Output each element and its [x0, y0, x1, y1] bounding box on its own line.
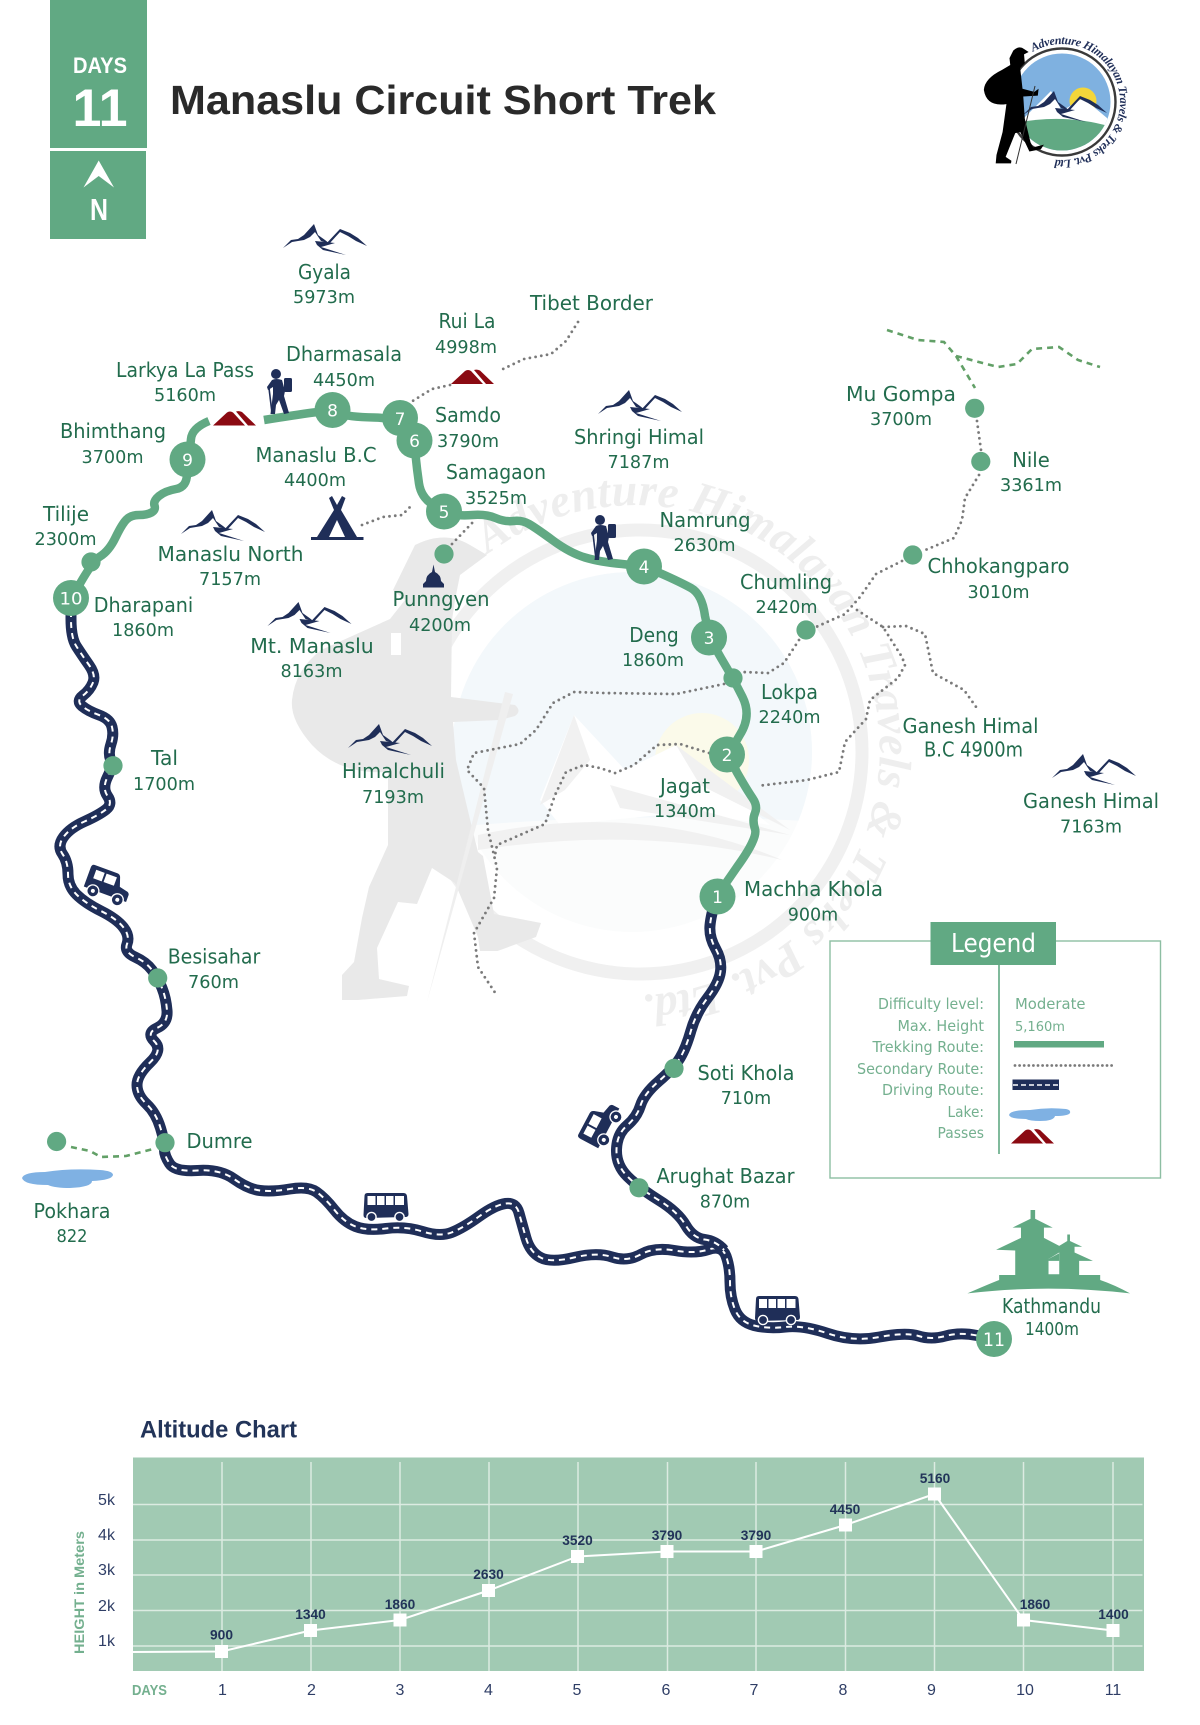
- label: Dharapani: [94, 593, 193, 641]
- driving route: west and south: [60, 600, 994, 1339]
- label: Tal: [133, 746, 195, 795]
- label: Soti Khola: 710m: [721, 1089, 771, 1109]
- legend: row labels: Secondary Route:: [857, 1060, 984, 1078]
- data values: [210, 1470, 1129, 1642]
- data values: 1340: [295, 1606, 326, 1622]
- label: Jagat: Jagat: [658, 774, 710, 798]
- legend: trekking sample: [1014, 1041, 1104, 1048]
- numbered stops: 11: [983, 1329, 1005, 1351]
- legend: row labels: Difficulty level:: [878, 995, 984, 1013]
- icon: mountain Mt. Manaslu: [268, 602, 352, 633]
- label: Ganesh Himal B.C: [902, 714, 1038, 762]
- label: Lokpa: [758, 680, 820, 728]
- label: Samdo: Samdo: [435, 403, 501, 427]
- label: Shringi Himal: [574, 425, 704, 473]
- label: Mt. Manaslu: 8163m: [280, 662, 342, 682]
- logo: Adventure Himalayan Travels and Treks: [984, 37, 1128, 168]
- data values: 1400: [1098, 1606, 1129, 1622]
- label: Ganesh Himal: Ganesh Himal: [1023, 789, 1159, 813]
- numbered stops: 5: [439, 503, 449, 523]
- label: Nile: [1000, 448, 1062, 496]
- labels: places and altitudes: [34, 260, 1159, 1340]
- label: Deng: [622, 623, 684, 671]
- legend heading: [930, 922, 1056, 965]
- label: Soti Khola: [698, 1061, 794, 1109]
- icon: bus west: [364, 1193, 408, 1222]
- x axis values: 9: [927, 1682, 936, 1699]
- label: Pokhara: Pokhara: [34, 1199, 110, 1223]
- label: Machha Khola: Machha Khola: [744, 877, 883, 901]
- legend: row labels: [857, 995, 984, 1142]
- label: Pokhara: 822: [56, 1227, 88, 1247]
- label: Tal: 1700m: [133, 775, 195, 795]
- label: Dharapani: Dharapani: [94, 593, 193, 617]
- icon: pass Larkya La: [213, 411, 256, 426]
- label: Namrung: Namrung: [660, 508, 750, 532]
- label: Larkya La Pass: [116, 358, 254, 406]
- label: Dharmasala: 4450m: [313, 371, 375, 391]
- days badge: [50, 0, 147, 148]
- icon: bus east: [755, 1296, 800, 1325]
- legend: lake sample: [1009, 1108, 1070, 1121]
- icon: stupa Punngyen: [423, 564, 444, 588]
- label: Nile: 3361m: [1000, 476, 1062, 496]
- x axis values: 2: [307, 1682, 316, 1699]
- label: Chhokangparo: [928, 554, 1070, 603]
- label: Namrung: [660, 508, 750, 556]
- label: Dumre: Dumre: [186, 1129, 252, 1153]
- label: Machha Khola: 900m: [788, 906, 838, 926]
- icon: mountain Manaslu North: [181, 510, 265, 541]
- label: Arughat Bazar: 870m: [700, 1192, 750, 1212]
- label: Samagaon: Samagaon: [446, 460, 546, 484]
- label: Ganesh Himal: 7163m: [1060, 818, 1122, 838]
- label: Samdo: 3790m: [437, 432, 499, 452]
- watermark: faded company logo behind map: Adventure Himalayan Travels & Treks Pvt. Ltd.: [484, 481, 912, 1026]
- label: Manaslu North: Manaslu North: [158, 542, 304, 566]
- altitude chart: [71, 1458, 1144, 1699]
- x axis values: 10: [1016, 1682, 1034, 1699]
- numbered stops: 3: [704, 629, 714, 649]
- watermark: faded company logo behind map: [292, 481, 912, 1026]
- label: Jagat: 1340m: [654, 802, 716, 822]
- y axis values: 2k: [98, 1598, 116, 1615]
- label: Soti Khola: Soti Khola: [698, 1061, 794, 1085]
- Pokhara link dashes: [71, 1147, 153, 1157]
- x axis values: 6: [662, 1682, 671, 1699]
- data values: 1860: [385, 1596, 415, 1612]
- icon: trekker near Dharmasala: [267, 369, 292, 414]
- label: Arughat Bazar: Arughat Bazar: [656, 1164, 795, 1188]
- label: Arughat Bazar: [656, 1164, 795, 1212]
- legend: max height value: 5,160m: [1015, 1019, 1065, 1035]
- icon: mountain Himalchuli: [348, 724, 432, 755]
- icon: mountain Ganesh Himal: [1052, 754, 1136, 785]
- icon: jeep west: [81, 864, 134, 909]
- legend: difficulty value: Moderate: [1015, 995, 1086, 1013]
- secondary routes (dotted): [362, 322, 981, 994]
- y axis values: [98, 1492, 116, 1650]
- altitude chart heading: Altitude Chart: [140, 1416, 297, 1444]
- numbered stops: 7: [395, 410, 405, 430]
- days badge: 11: [72, 79, 128, 138]
- label: Ganesh Himal: [1023, 789, 1159, 838]
- label: Machha Khola: [744, 877, 883, 926]
- label: Rui La: [435, 309, 497, 358]
- data values: 4450: [830, 1501, 860, 1517]
- label: Ganesh Himal B.C: Ganesh Himal: [902, 714, 1038, 738]
- icon: Pokhara lake: [22, 1169, 113, 1188]
- label: Gyala: [293, 260, 355, 308]
- label: Punngyen: [392, 587, 490, 636]
- data values: 3790: [652, 1527, 682, 1543]
- icon: trekker near Namrung: [591, 515, 616, 560]
- legend: row labels: Driving Route:: [882, 1081, 984, 1099]
- legend heading: Legend: [951, 929, 1036, 959]
- label: Bhimthang: 3700m: [82, 448, 144, 468]
- boundary dashes near Mu Gompa: [887, 330, 1100, 388]
- label: Kathmandu: 1400m: [1025, 1320, 1079, 1340]
- label: Mu Gompa: Mu Gompa: [846, 382, 956, 406]
- label: Dharmasala: Dharmasala: [286, 342, 402, 366]
- label: Chhokangparo: Chhokangparo: [928, 554, 1070, 578]
- legend: pass sample: [1011, 1129, 1054, 1144]
- days badge: DAYS: [73, 53, 127, 78]
- title: Manaslu Circuit Short Trek: [170, 77, 716, 123]
- panel: legend: [830, 922, 1160, 1178]
- label: Mt. Manaslu: Mt. Manaslu: [250, 634, 374, 658]
- x axis values: 8: [839, 1682, 848, 1699]
- label: Himalchuli: Himalchuli: [342, 759, 445, 783]
- label: Bhimthang: Bhimthang: [60, 419, 166, 443]
- y axis values: 3k: [98, 1562, 116, 1579]
- label: Tal: Tal: [150, 746, 178, 770]
- icon: tent Manaslu base camp: [311, 496, 364, 540]
- label: Manaslu B.C: 4400m: [284, 471, 346, 491]
- label: Mu Gompa: 3700m: [870, 410, 932, 430]
- label: Besisahar: [168, 944, 261, 993]
- small stops: [47, 399, 990, 1197]
- label: Nile: Nile: [1012, 448, 1050, 472]
- label: Manaslu North: [158, 542, 304, 590]
- label: Samdo: [435, 403, 501, 452]
- x axis values: 5: [573, 1682, 582, 1699]
- data values: 3520: [562, 1532, 593, 1548]
- legend: driving sample: [1012, 1080, 1059, 1090]
- label: Larkya La Pass: Larkya La Pass: [116, 358, 254, 382]
- label: Shringi Himal: 7187m: [608, 453, 670, 473]
- label: Chumling: Chumling: [740, 570, 832, 594]
- label: Deng: 1860m: [622, 651, 684, 671]
- label: Punngyen: Punngyen: [392, 587, 490, 611]
- label: Jagat: [654, 774, 716, 822]
- label: Himalchuli: 7193m: [362, 788, 424, 808]
- label: Mu Gompa: [846, 382, 956, 430]
- label: Deng: Deng: [629, 623, 679, 647]
- label: Besisahar: 760m: [188, 973, 239, 993]
- y axis values: 1k: [98, 1633, 116, 1650]
- label: Lokpa: 2240m: [758, 708, 820, 728]
- label: Shringi Himal: Shringi Himal: [574, 425, 704, 449]
- legend: secondary sample: [1015, 1064, 1113, 1067]
- x axis values: 1: [218, 1682, 227, 1699]
- data points: [215, 1488, 1120, 1658]
- label: Kathmandu: Kathmandu: [1002, 1294, 1101, 1318]
- data values: 2630: [473, 1566, 504, 1582]
- numbered stops: 9: [182, 451, 193, 471]
- x axis values: 7: [750, 1682, 759, 1699]
- icon: Kathmandu temple: [967, 1210, 1130, 1293]
- legend: row labels: Trekking Route:: [872, 1038, 984, 1056]
- label: Gyala: 5973m: [293, 288, 355, 308]
- numbered stops: 1: [712, 888, 723, 908]
- label: Gyala: Gyala: [298, 260, 351, 284]
- label: Manaslu North: 7157m: [199, 570, 261, 590]
- label: Dharmasala: [286, 342, 402, 391]
- x axis values: 4: [484, 1682, 493, 1699]
- x axis values: 11: [1105, 1682, 1121, 1699]
- label: Tilije: [34, 502, 96, 550]
- data values: 5160: [920, 1470, 950, 1486]
- y axis values: 4k: [98, 1527, 116, 1544]
- legend: row labels: Lake:: [948, 1103, 984, 1121]
- icon: mountain Gyala: [283, 224, 367, 255]
- trekking route: [71, 411, 756, 896]
- driving route: east branch: [616, 896, 724, 1250]
- north arrow box: N: [90, 192, 108, 227]
- label: Dharapani: 1860m: [112, 621, 174, 641]
- label: Tibet Border: Tibet Border: [529, 291, 654, 315]
- altitude line: [133, 1494, 1113, 1652]
- label: Punngyen: 4200m: [409, 616, 471, 636]
- icon: pass Rui La: [451, 370, 494, 384]
- label: Tilije: 2300m: [34, 530, 96, 550]
- north arrow box: [50, 151, 146, 239]
- numbered stops: 6: [409, 432, 420, 452]
- label: Lokpa: Lokpa: [761, 680, 818, 704]
- data values: 1860: [1020, 1596, 1050, 1612]
- x axis title: DAYS: [132, 1682, 167, 1699]
- label: Rui La: 4998m: [435, 338, 497, 358]
- x axis values: 3: [396, 1682, 405, 1699]
- y axis values: 5k: [98, 1492, 116, 1509]
- label: Chumling: [740, 570, 832, 618]
- label: Chhokangparo: 3010m: [968, 583, 1030, 603]
- numbered stops: 4: [639, 558, 649, 578]
- label: Samagaon: [446, 460, 546, 509]
- label: Namrung: 2630m: [674, 536, 736, 556]
- label: Chumling: 2420m: [756, 598, 818, 618]
- legend: row labels: Passes: [938, 1124, 984, 1142]
- label: Besisahar: Besisahar: [168, 944, 261, 968]
- numbered stops: [53, 392, 1012, 1357]
- data values: 3790: [741, 1527, 771, 1543]
- data values: 900: [210, 1626, 233, 1642]
- icon: mountain Shringi Himal: [598, 390, 682, 421]
- numbered stops: 8: [327, 402, 338, 422]
- label: Manaslu B.C: Manaslu B.C: [256, 443, 376, 467]
- label: Samagaon: 3525m: [465, 489, 527, 509]
- label: Himalchuli: [342, 759, 445, 808]
- label: Tilije: Tilije: [42, 502, 89, 526]
- label: Bhimthang: [60, 419, 166, 468]
- label: Pokhara: [34, 1199, 110, 1247]
- icon: jeep east: [577, 1097, 625, 1152]
- y axis title: HEIGHT in Meters: [71, 1531, 87, 1654]
- label: Ganesh Himal B.C: B.C 4900m: [924, 738, 1023, 762]
- legend: row labels: Max. Height: [898, 1017, 984, 1035]
- numbered stops: 2: [722, 746, 732, 766]
- label: Mt. Manaslu: [250, 634, 374, 682]
- label: Larkya La Pass: 5160m: [154, 386, 216, 406]
- label: Manaslu B.C: [256, 443, 376, 491]
- label: Kathmandu: [1002, 1294, 1101, 1340]
- label: Rui La: Rui La: [438, 309, 496, 333]
- x axis values: [218, 1682, 1121, 1699]
- numbered stops: 10: [60, 590, 82, 610]
